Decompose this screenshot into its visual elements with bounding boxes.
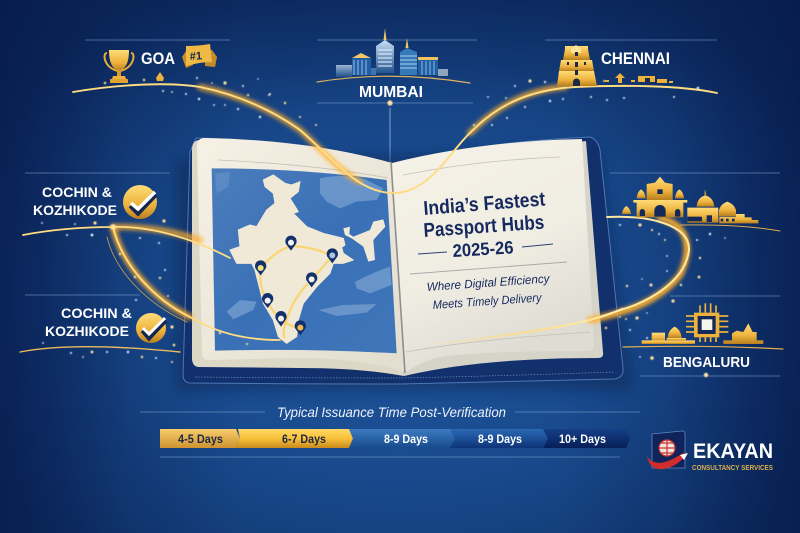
route lines xyxy=(260,246,332,338)
gold swooshes xyxy=(20,76,783,352)
Delhi baseline xyxy=(680,225,780,231)
timeline xyxy=(160,404,630,448)
page stack right xyxy=(392,141,603,376)
page stack left xyxy=(192,140,404,376)
right page xyxy=(392,139,594,373)
map background xyxy=(212,168,397,353)
swoosh: Cochin thin xyxy=(107,237,187,322)
segment: 8-9 days second: 8-9 Days xyxy=(478,432,522,446)
timeline bar xyxy=(160,429,630,448)
logo: Ekayan xyxy=(647,431,773,472)
icon: small marker xyxy=(156,72,164,81)
label: CHENNAI: CHENNAI xyxy=(601,49,670,68)
swoosh: Cochin upper xyxy=(23,227,230,258)
swoosh: Goa to Chennai xyxy=(73,84,717,193)
subtitle line 1: Where Digital Efficiency xyxy=(426,271,551,294)
book title block xyxy=(410,188,567,312)
segment: 8-9 days xyxy=(349,429,455,448)
city: Bengaluru xyxy=(642,303,763,371)
page lines xyxy=(218,157,590,352)
icon: small shrines xyxy=(605,73,673,83)
city: Goa xyxy=(105,44,217,83)
city: Delhi skyline xyxy=(622,177,758,223)
swoosh: right arc over page xyxy=(420,310,620,345)
icon: check badge xyxy=(136,313,166,343)
segment: 10+ days: 10+ Days xyxy=(559,432,606,446)
segment: 4-5 days: 4-5 Days xyxy=(178,432,223,446)
title dashes xyxy=(418,244,553,254)
map clouds xyxy=(215,172,392,319)
city: Cochin & Kozhikode (lower) xyxy=(45,305,166,343)
city: Chennai xyxy=(557,45,673,86)
pin: east xyxy=(327,248,338,263)
label: COCHIN & xyxy=(42,184,112,200)
map panel xyxy=(212,168,397,353)
label: KOZHIKODE xyxy=(45,323,129,339)
Bengaluru baseline xyxy=(623,346,783,349)
label: KOZHIKODE xyxy=(33,202,117,218)
segment: 10+ days xyxy=(543,429,630,448)
right-page stitch xyxy=(195,372,615,378)
segment: 6-7 days xyxy=(236,429,353,448)
icon: gopuram temple xyxy=(557,45,597,86)
connector: Mumbai to book xyxy=(389,108,391,165)
label: GOA: GOA xyxy=(141,49,175,68)
segment: 6-7 days: 6-7 Days xyxy=(282,432,326,446)
India northeast xyxy=(343,219,385,262)
logo name: EKAYAN xyxy=(693,440,773,463)
swoosh: right arc xyxy=(607,217,689,310)
icon: trophy xyxy=(105,50,133,83)
skyline xyxy=(336,28,448,77)
segment: 8-9 days: 8-9 Days xyxy=(384,432,428,446)
swoosh: Cochin lower xyxy=(113,227,280,340)
badge: #1: #1 xyxy=(189,50,202,63)
pin: Chennai xyxy=(295,320,306,335)
city: Mumbai xyxy=(336,28,448,101)
book cover xyxy=(183,137,623,384)
subtitle line 2: Meets Timely Delivery xyxy=(432,290,543,312)
label: BENGALURU: BENGALURU xyxy=(663,354,750,371)
logo icon: passport and globe xyxy=(647,431,688,469)
divider lines xyxy=(25,40,780,457)
pin: central xyxy=(306,272,317,287)
title line 1: India’s Fastest xyxy=(423,188,546,220)
segment: 4-5 days xyxy=(160,429,240,448)
label: MUMBAI: MUMBAI xyxy=(359,84,423,101)
title divider xyxy=(410,262,567,274)
segment: 8-9 days second xyxy=(450,429,548,448)
left page xyxy=(197,138,405,372)
sparkles xyxy=(41,77,726,377)
pins xyxy=(255,236,338,335)
pin: Goa xyxy=(262,293,273,308)
book xyxy=(176,137,632,390)
glow xyxy=(113,87,687,320)
India map xyxy=(230,175,353,343)
city: Cochin & Kozhikode (upper) xyxy=(33,184,157,219)
icon: check badge xyxy=(123,185,157,219)
icon: chip and skyline xyxy=(642,303,763,344)
pin: Cochin xyxy=(275,311,287,327)
title line 2: Passport Hubs xyxy=(423,212,545,242)
book shadow xyxy=(176,150,632,390)
pin: north xyxy=(285,236,297,251)
pin: Mumbai xyxy=(255,260,266,275)
logo tagline: CONSULTANCY SERVICES xyxy=(692,463,773,472)
timeline heading: Typical Issuance Time Post-Verification xyxy=(277,404,506,420)
Mumbai baseline xyxy=(317,76,470,83)
spine xyxy=(391,162,405,373)
swoosh: Cochin second baseline xyxy=(20,347,180,352)
title year: 2025-26 xyxy=(452,237,514,261)
label: COCHIN & xyxy=(61,305,132,321)
